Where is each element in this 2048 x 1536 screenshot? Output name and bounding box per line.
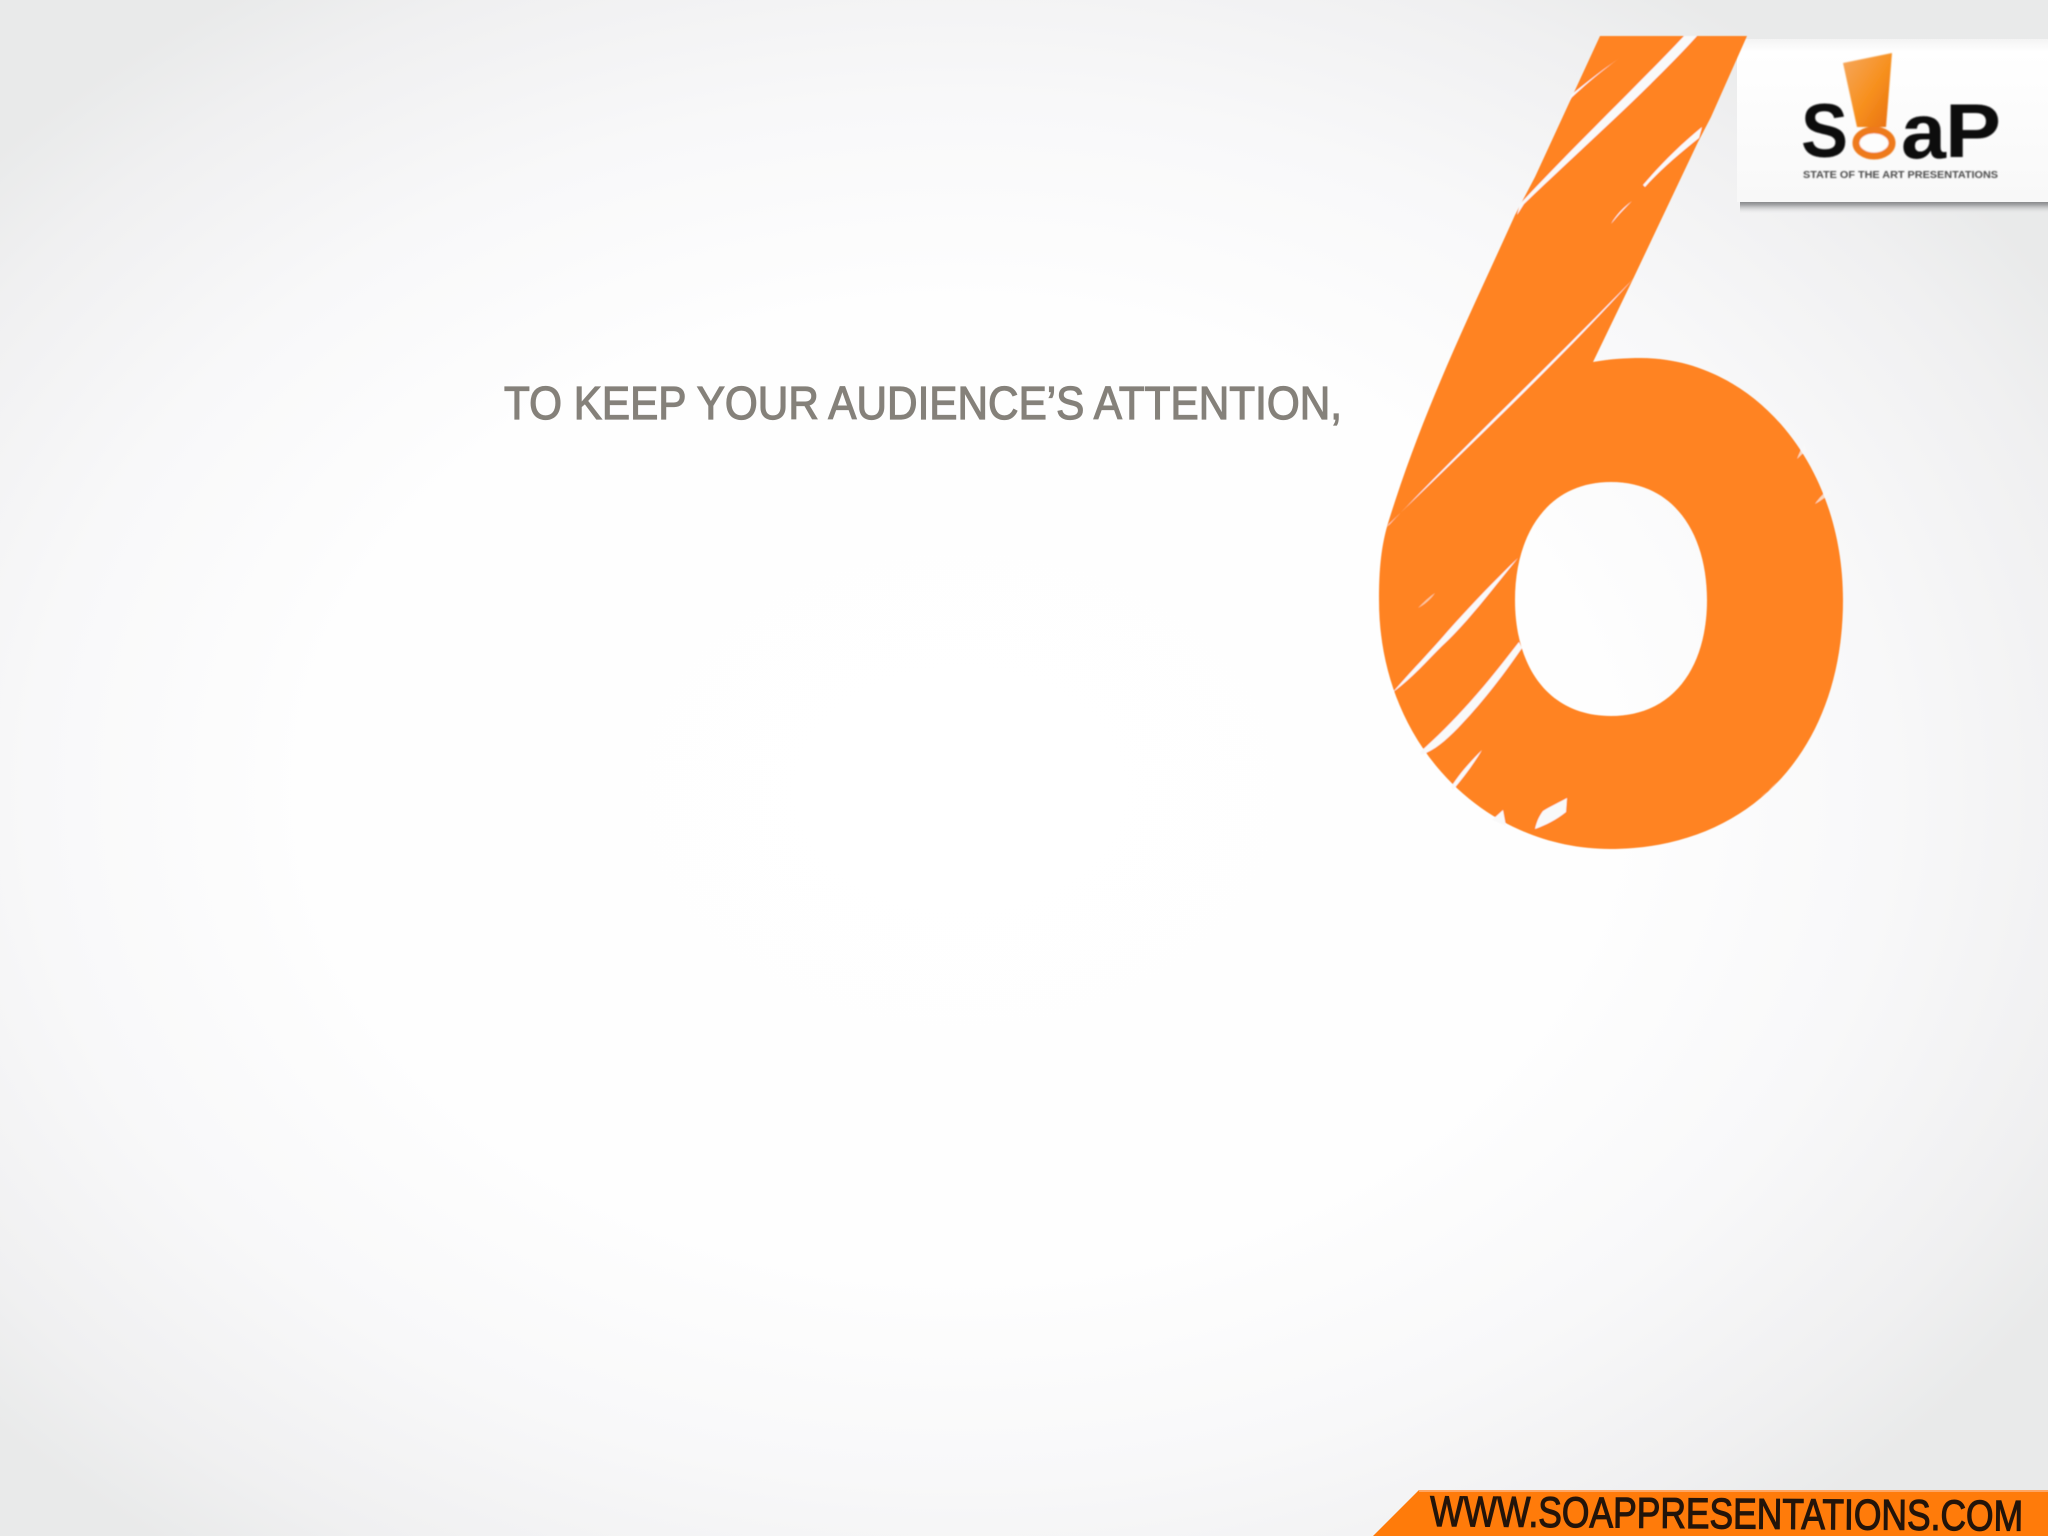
scratch: short lower bbox=[1451, 750, 1482, 790]
scratch: right edge wedge bbox=[1643, 127, 1702, 187]
banner highlight bbox=[1419, 1490, 2048, 1492]
scratch: short thin upper bbox=[1611, 201, 1632, 224]
scratch: notch at bottom bbox=[1492, 810, 1506, 826]
numeral body bbox=[1379, 36, 1843, 849]
scratch: faint fleck left bbox=[1418, 593, 1435, 608]
panel card bbox=[1737, 39, 2048, 202]
scratch: top main bbox=[1517, 36, 1697, 215]
logo tagline: STATE OF THE ART PRESENTATIONS bbox=[1803, 170, 1998, 181]
scratch: top thin bbox=[1569, 57, 1621, 100]
logo panel bbox=[1737, 39, 2048, 214]
scratch: faint right top bbox=[1797, 444, 1807, 459]
logo: Soap bbox=[1801, 53, 2001, 181]
scratches bbox=[1387, 36, 1831, 829]
scratch: diamond chip bbox=[1535, 798, 1567, 829]
scratch: long thin diagonal bbox=[1387, 278, 1634, 527]
scratch: faint lower right bbox=[1760, 782, 1777, 797]
scratch: lower left long bbox=[1393, 558, 1518, 692]
scratch: faint right upper bbox=[1815, 489, 1831, 504]
exclamation dot ring bbox=[1856, 130, 1892, 156]
panel shadow bbox=[1740, 200, 2048, 214]
headline: TO KEEP YOUR AUDIENCE’S ATTENTION, bbox=[504, 377, 1342, 429]
banner shape bbox=[1373, 1490, 2048, 1536]
exclamation mark bar bbox=[1843, 53, 1892, 127]
scratch: lower left through hole bbox=[1420, 642, 1522, 755]
letter P: P bbox=[1945, 89, 2001, 174]
footer website banner bbox=[1373, 1488, 2048, 1536]
letter S: S bbox=[1801, 89, 1848, 174]
letter a: a bbox=[1901, 87, 1947, 175]
big orange numeral 6 bbox=[1379, 36, 1843, 849]
